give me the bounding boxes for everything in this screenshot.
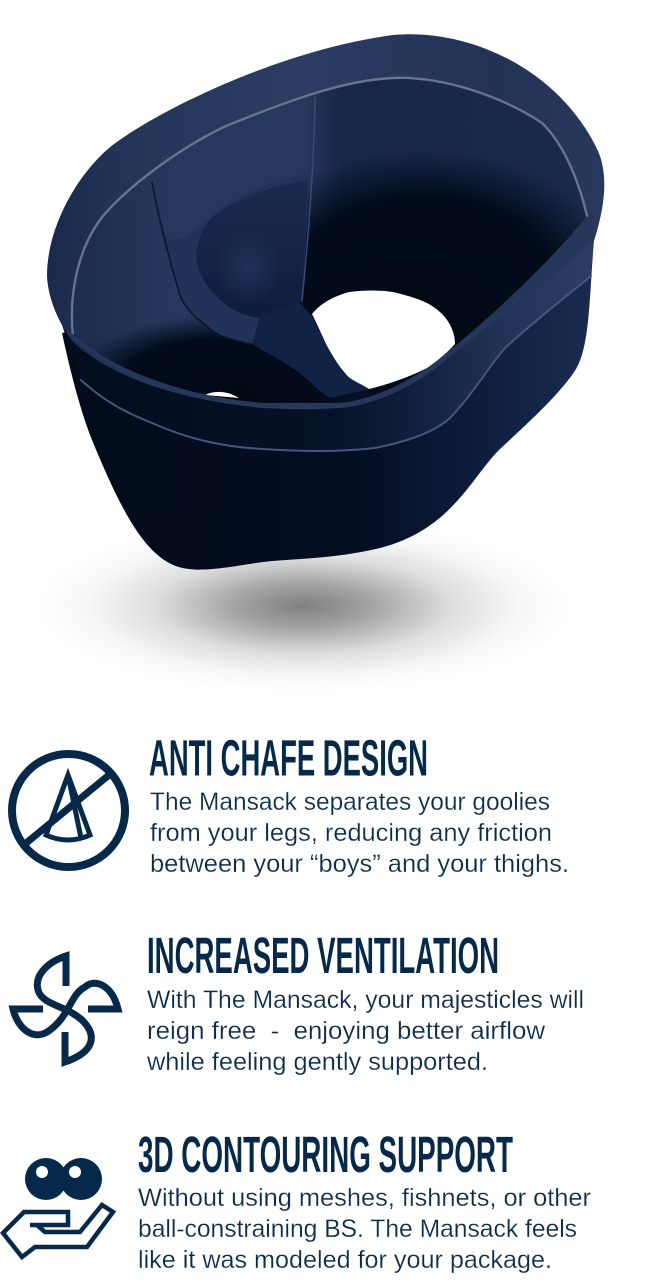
text block <box>150 788 569 878</box>
text block <box>146 986 584 1076</box>
front rim edge <box>68 232 592 406</box>
seam lines <box>72 78 591 451</box>
text block: from your legs, reducing any friction <box>150 819 552 847</box>
rim <box>47 34 604 409</box>
front waistband <box>62 235 594 451</box>
interior shading <box>96 79 586 403</box>
garment body <box>62 240 594 570</box>
text block: between your “boys” and your thighs. <box>150 850 569 878</box>
leg opening <box>312 290 455 389</box>
text block: The Mansack separates your goolies <box>150 788 550 816</box>
text block: reign free - enjoying better airflow <box>147 1017 546 1045</box>
icon: fan <box>13 956 118 1062</box>
text block: With The Mansack, your majesticles will <box>147 986 584 1014</box>
text block: ball-constraining BS. The Mansack feels <box>138 1215 577 1243</box>
feature: anti chafe design <box>12 730 569 878</box>
small leg opening <box>205 392 239 398</box>
text block: like it was modeled for your package. <box>138 1246 552 1274</box>
text block: Without using meshes, fishnets, or other <box>138 1184 591 1212</box>
feature: 3d contouring support <box>3 1126 591 1274</box>
pouch <box>201 184 309 344</box>
strap <box>252 303 369 398</box>
feature: increased ventilation <box>13 927 584 1076</box>
text block <box>138 1184 591 1274</box>
product illustration: underwear <box>40 34 625 570</box>
text block: while feeling gently supported. <box>146 1048 488 1076</box>
heading: ANTI CHAFE DESIGN <box>149 730 428 786</box>
product shadow <box>33 518 573 694</box>
icon: hand holding balls <box>3 1158 113 1257</box>
icon: crossed cone <box>12 754 125 867</box>
